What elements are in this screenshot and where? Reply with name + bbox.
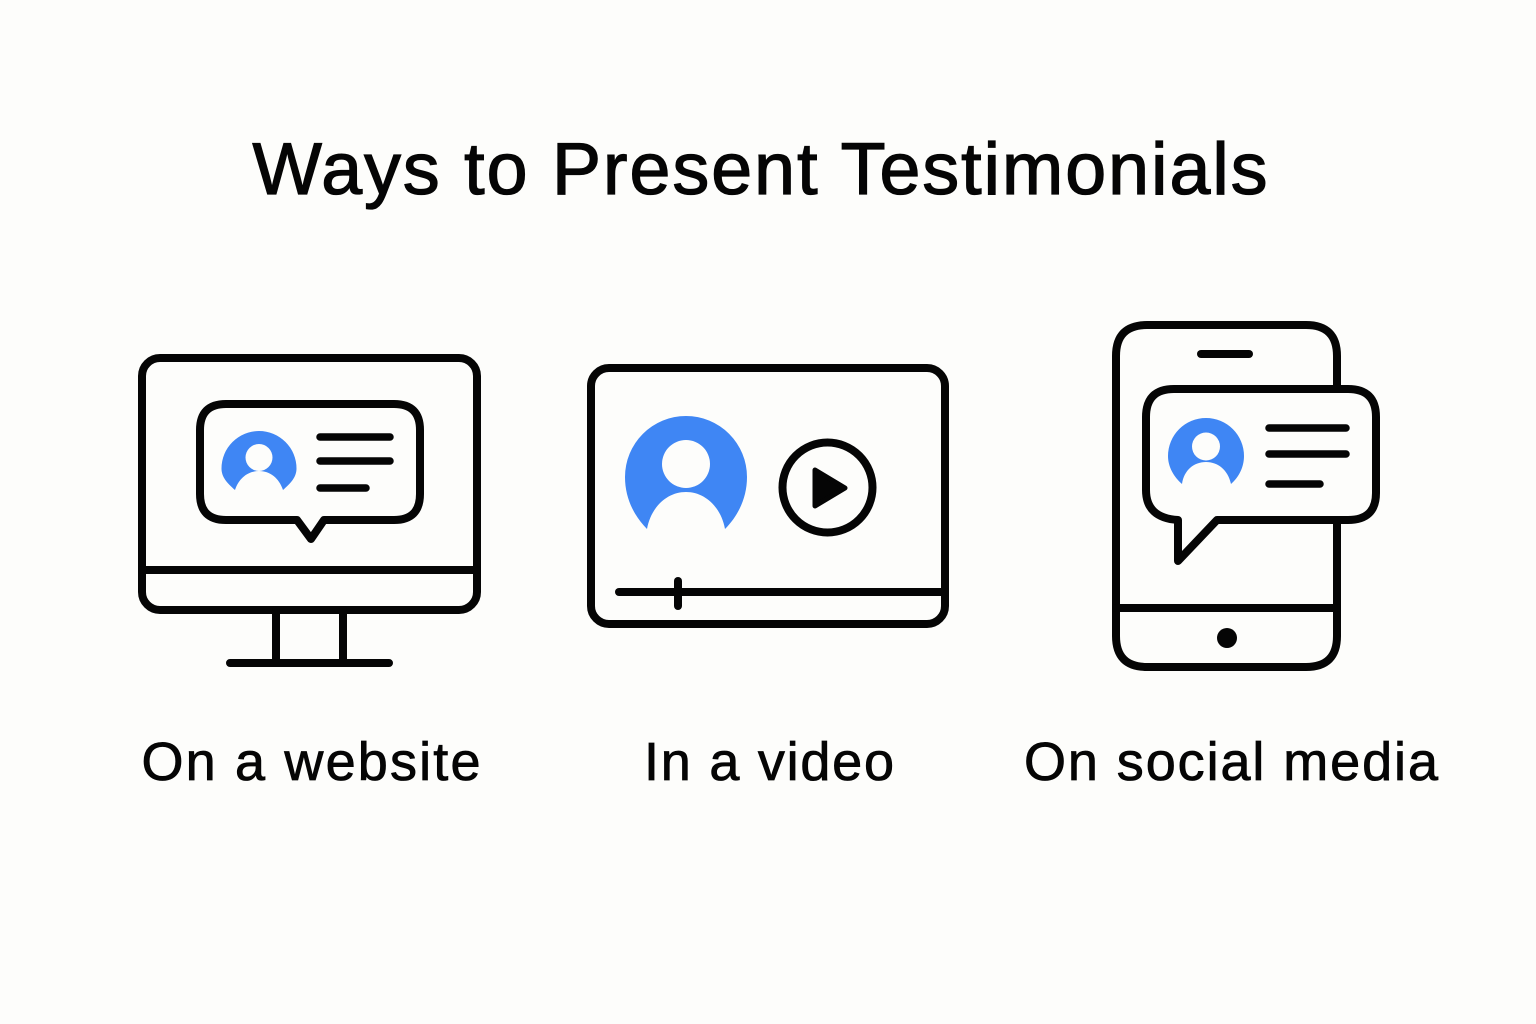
- icon: video player: [591, 368, 945, 624]
- icon: smartphone with testimonial: [1116, 325, 1376, 667]
- label: video: In a video: [644, 732, 894, 792]
- icon: desktop monitor with testimonial: [142, 358, 477, 663]
- icon: play button: [782, 442, 872, 532]
- avatar: website: [222, 431, 296, 490]
- avatar: social media: [1168, 418, 1244, 484]
- avatar: video: [625, 416, 747, 529]
- label: social media: On social media: [1024, 732, 1439, 792]
- label: website: On a website: [142, 732, 480, 792]
- title: Ways to Present Testimonials: [252, 127, 1268, 210]
